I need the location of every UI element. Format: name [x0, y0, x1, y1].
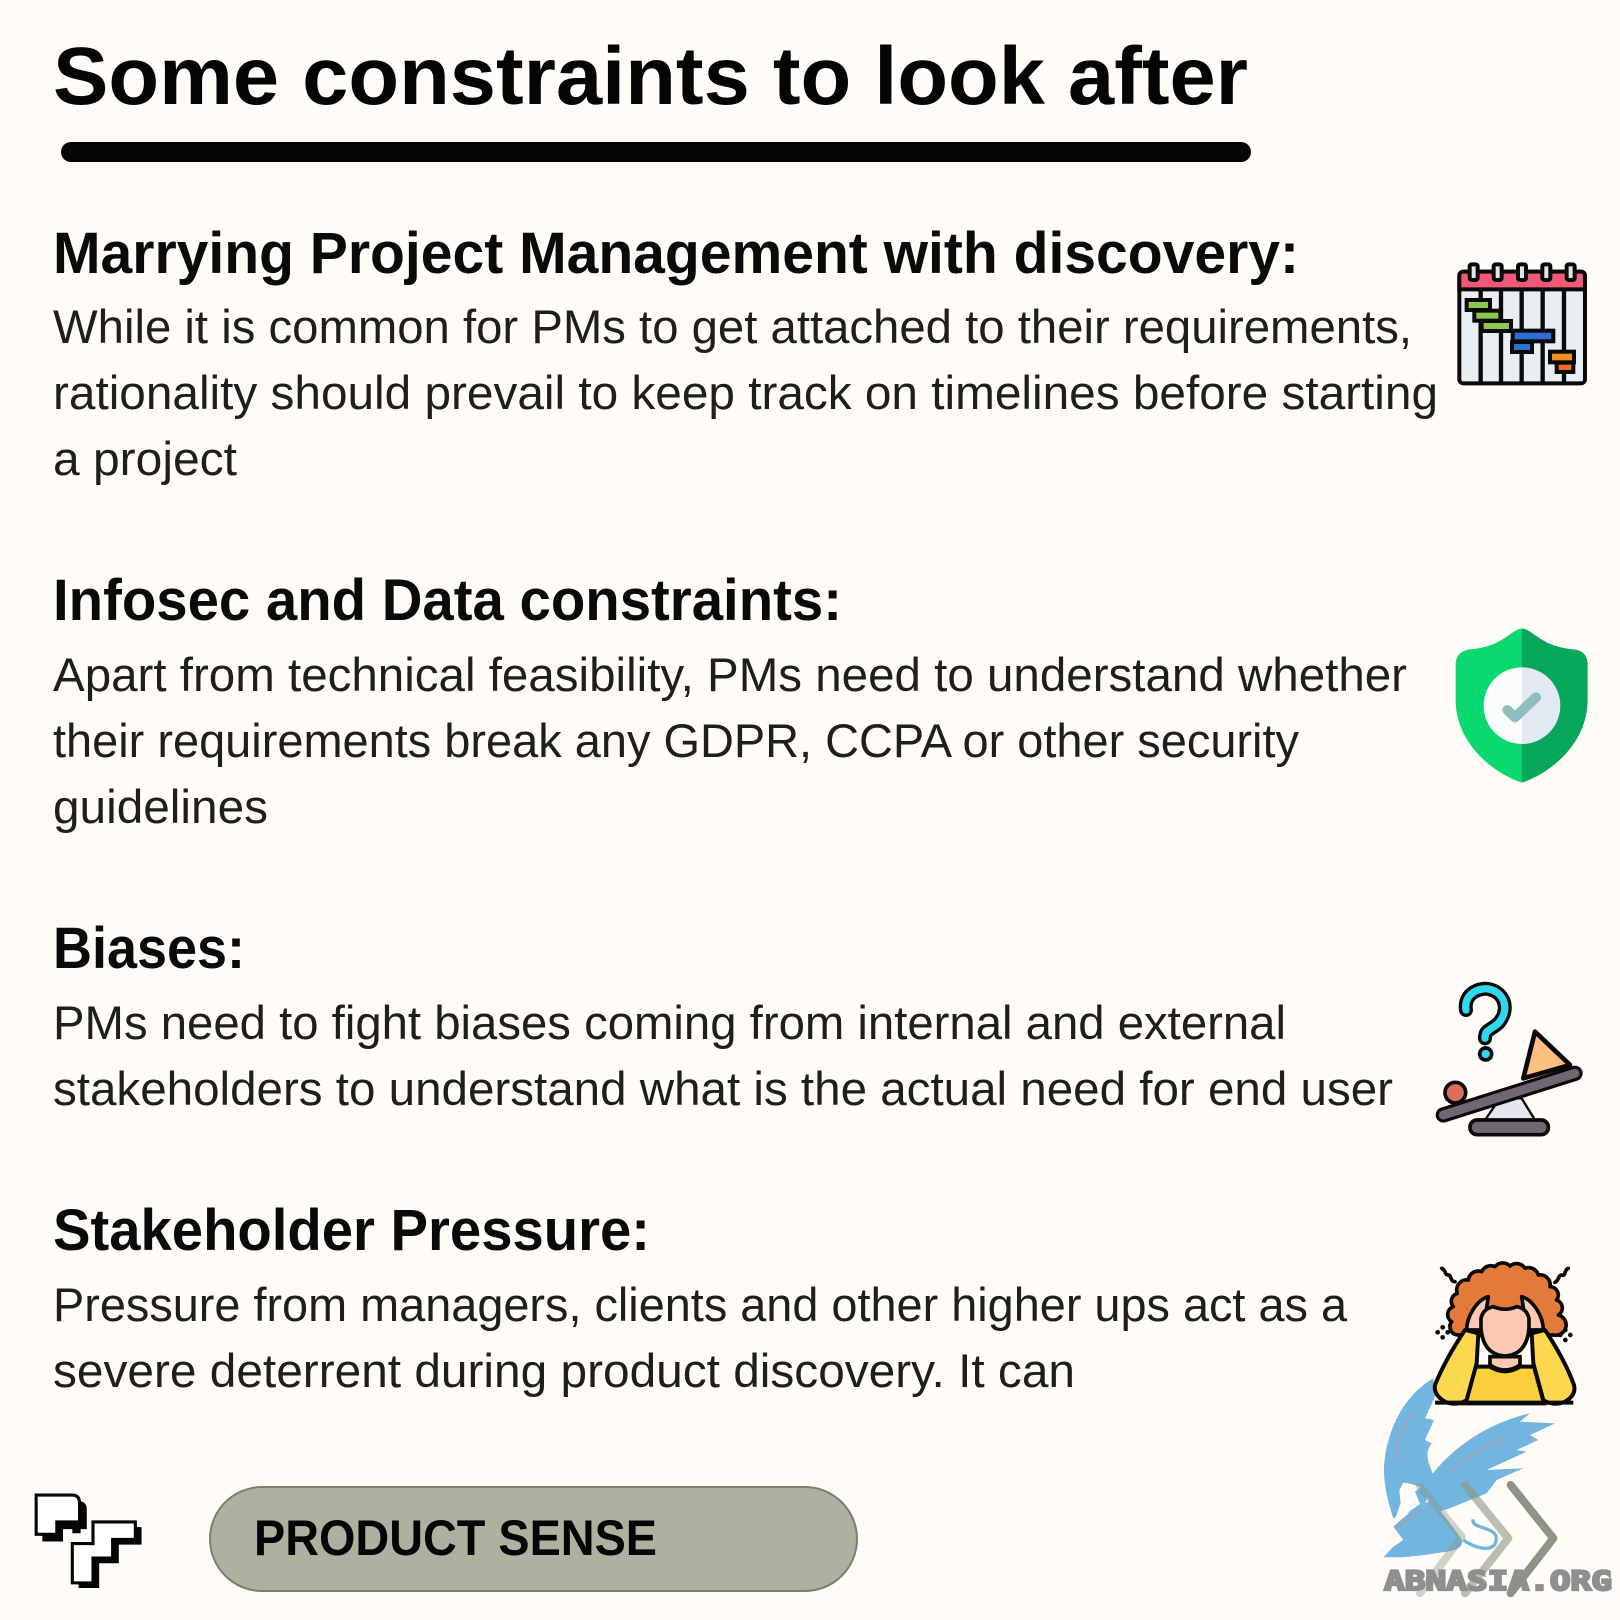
heading: Stakeholder Pressure:	[53, 1198, 650, 1263]
body text: Apart from technical feasibility, PMs need to understand whether	[53, 648, 1407, 701]
button label: PRODUCT SENSE	[254, 1510, 657, 1566]
body text	[53, 648, 1407, 833]
heading: Biases:	[53, 916, 245, 981]
body text	[53, 300, 1438, 485]
icon: green shield with check	[1456, 628, 1588, 783]
logo: PS pixel mark	[36, 1495, 142, 1588]
body text: severe deterrent during product discovery. It can	[53, 1344, 1075, 1397]
heading: Marrying Project Management with discovery:	[53, 221, 1299, 286]
body text: their requirements break any GDPR, CCPA or other security	[53, 714, 1299, 767]
button: product sense	[210, 1487, 857, 1591]
body text: stakeholders to understand what is the actual need for end user	[53, 1062, 1393, 1115]
icon: question mark and seesaw	[1443, 989, 1575, 1135]
chevrons	[1420, 1485, 1553, 1593]
panel: marrying project management with discovery	[53, 221, 1438, 485]
body text: PMs need to fight biases coming from internal and external	[53, 996, 1286, 1049]
body text: While it is common for PMs to get attached to their requirements,	[53, 300, 1412, 353]
body text: guidelines	[53, 780, 268, 833]
icon: gantt calendar	[1459, 264, 1585, 383]
title: Some constraints to look after	[53, 31, 1248, 122]
panel: stakeholder pressure	[53, 1198, 1348, 1397]
panel: infosec and data constraints	[53, 568, 1407, 833]
body text	[53, 996, 1393, 1115]
body text	[53, 1278, 1348, 1397]
body text: rationality should prevail to keep track on timelines before starting	[53, 366, 1438, 419]
title underline	[61, 142, 1251, 162]
watermark text: ABNASIA.ORG	[1384, 1566, 1612, 1597]
body text: Pressure from managers, clients and other higher ups act as a	[53, 1278, 1348, 1331]
body text: a project	[53, 432, 237, 485]
heading: Infosec and Data constraints:	[53, 568, 842, 633]
icon: stressed person holding head	[1435, 1263, 1574, 1404]
panel: biases	[53, 916, 1393, 1115]
watermark: griffin with chevrons and site name	[1383, 1378, 1555, 1593]
griffin	[1383, 1378, 1555, 1557]
